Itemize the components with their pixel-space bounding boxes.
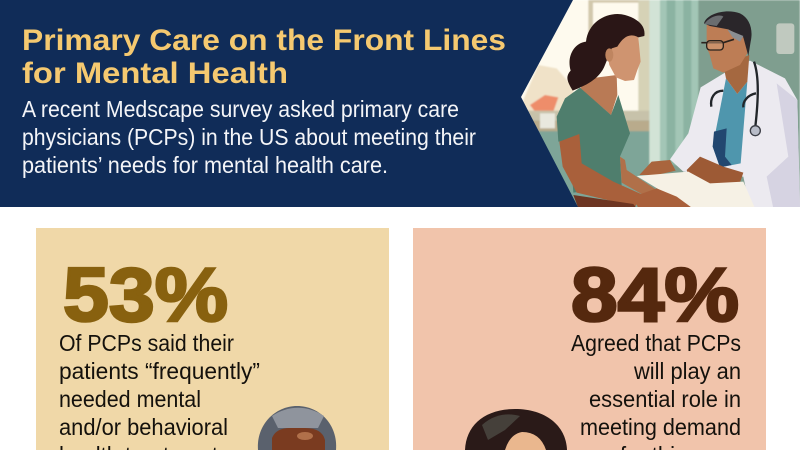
title (22, 24, 506, 90)
panel background (413, 228, 766, 450)
intro text: A recent Medscape survey asked primary care (22, 96, 459, 122)
table sheet (637, 172, 755, 208)
statistic description: Agreed that PCPs (571, 330, 741, 356)
white coat (670, 61, 800, 208)
patient (557, 14, 693, 208)
neck (723, 55, 749, 94)
statistic description: Of PCPs said their (59, 330, 234, 356)
panel: 84 percent (413, 228, 766, 450)
intro text: patients’ needs for mental health care. (22, 152, 388, 178)
room background (510, 0, 800, 208)
title: Primary Care on the Front Lines (22, 24, 506, 57)
doctor (639, 11, 800, 208)
statistic description: essential role in (589, 386, 741, 412)
arms (559, 134, 643, 207)
wall switch (776, 23, 794, 54)
stethoscope (711, 62, 758, 127)
statistic description: patients “frequently” (59, 358, 260, 384)
hair (567, 14, 645, 91)
hands (639, 160, 676, 175)
ear (605, 48, 613, 62)
head (707, 25, 747, 73)
glasses (701, 39, 734, 43)
panel background (36, 228, 389, 450)
skirt (573, 195, 637, 208)
statistic description: meeting demand (580, 414, 741, 440)
intro text: physicians (PCPs) in the US about meeting their (22, 124, 476, 150)
portrait: woman (465, 409, 567, 450)
statistic description: and/or behavioral (59, 414, 228, 440)
neck and chest (580, 75, 617, 115)
intro text (22, 96, 476, 178)
scrubs (713, 78, 747, 167)
face (607, 35, 641, 81)
statistic: 84% (571, 253, 739, 338)
header band (0, 0, 578, 207)
hair (704, 11, 752, 56)
title: for Mental Health (22, 57, 288, 90)
portrait: older man (258, 406, 336, 450)
statistic description (571, 330, 741, 450)
statistic description (59, 330, 260, 450)
statistic description: will play an (633, 358, 741, 384)
illustration: patient and doctor consultation (510, 0, 800, 208)
shirt (557, 88, 630, 193)
statistic description: needed mental (59, 386, 201, 412)
statistic: 53% (63, 253, 228, 338)
hands (633, 188, 693, 208)
panel: 53 percent (36, 228, 389, 450)
